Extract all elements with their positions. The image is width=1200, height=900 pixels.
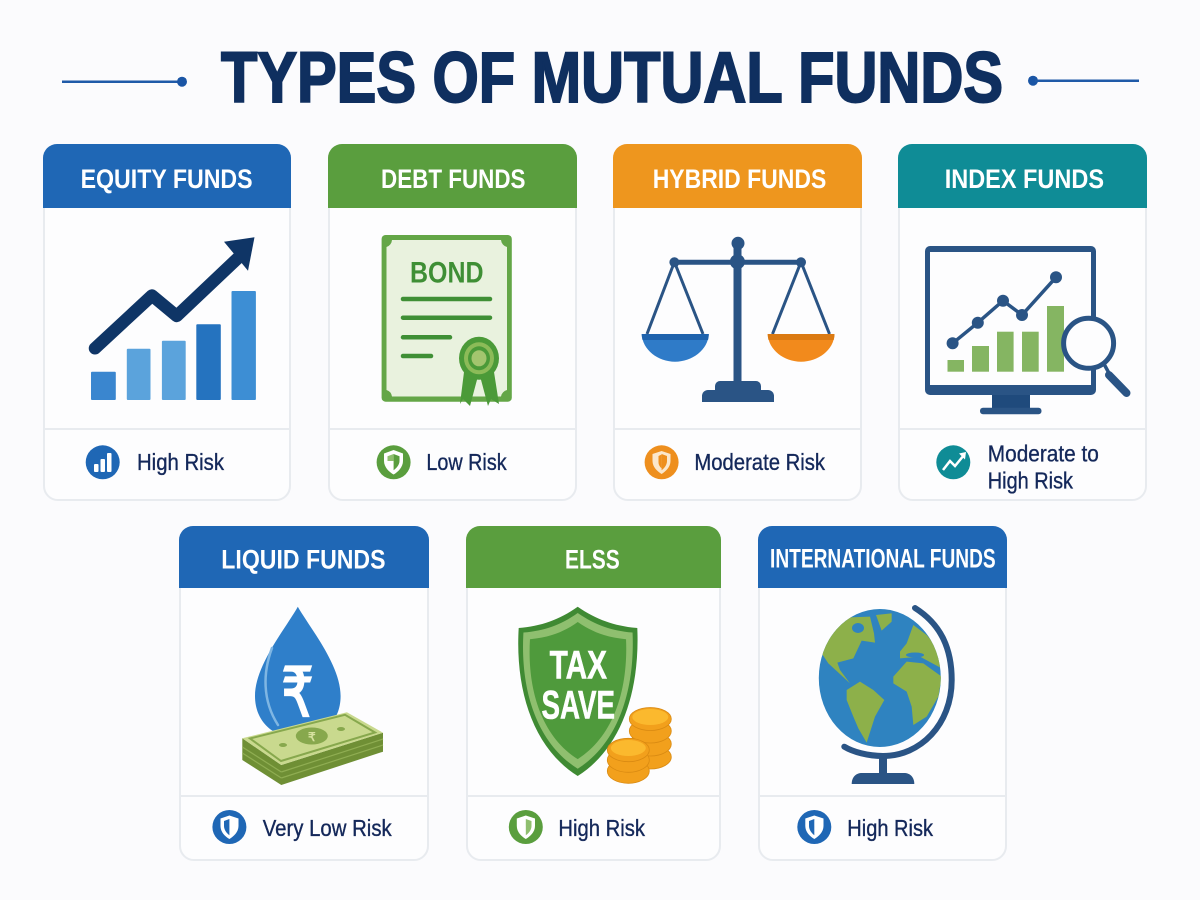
icon: balance scale xyxy=(642,237,834,402)
panel: debt funds xyxy=(328,144,577,500)
risk label: Low Risk xyxy=(426,449,507,475)
risk label: High Risk xyxy=(558,815,645,841)
panel: equity funds: EQUITY FUNDS xyxy=(81,164,253,194)
risk label: Very Low Risk xyxy=(263,815,392,841)
risk label: High Risk xyxy=(137,449,224,475)
risk badge: moderate to high risk xyxy=(936,445,970,479)
heading: debt funds xyxy=(328,144,577,208)
panel: equity funds xyxy=(43,144,291,500)
panel: international funds: INTERNATIONAL FUNDS xyxy=(770,544,996,574)
risk badge: elss high risk xyxy=(509,810,543,844)
risk label line two: High Risk xyxy=(988,467,1073,493)
heading: hybrid funds xyxy=(613,144,862,208)
heading: international funds xyxy=(758,526,1007,588)
panel: index funds: INDEX FUNDS xyxy=(945,164,1104,194)
panel: index funds xyxy=(898,144,1147,500)
panel: debt funds: DEBT FUNDS xyxy=(381,164,526,194)
risk badge: very low risk xyxy=(212,810,246,844)
title: TYPES OF MUTUAL FUNDS xyxy=(221,39,1003,118)
icon: water drop with rupee and cash xyxy=(242,607,383,785)
panel: international funds xyxy=(758,526,1007,861)
heading: index funds xyxy=(898,144,1147,208)
risk badge: high risk xyxy=(86,445,120,479)
risk label: High Risk xyxy=(847,815,933,841)
risk label: Moderate to xyxy=(988,441,1099,467)
icon: bond certificate: BOND xyxy=(410,257,484,290)
panel: liquid funds xyxy=(179,526,429,860)
icon: water drop with rupee and cash: ₹ xyxy=(308,730,316,744)
risk badge: moderate risk xyxy=(645,445,679,479)
panel: hybrid funds xyxy=(613,144,862,500)
heading: equity funds xyxy=(43,144,291,208)
icon: water drop with rupee and cash: ₹ xyxy=(282,655,314,731)
icon: tax save shield with coins xyxy=(518,607,671,783)
panel: elss xyxy=(466,526,721,860)
panel: elss: ELSS xyxy=(565,544,620,574)
risk badge: low risk xyxy=(377,445,411,479)
icon: tax save shield with coins: SAVE xyxy=(542,683,615,727)
icon: monitor with chart and magnifier xyxy=(925,246,1126,414)
icon: bond certificate xyxy=(382,235,512,406)
heading: elss xyxy=(466,526,721,588)
heading: liquid funds xyxy=(179,526,429,588)
panel: liquid funds: LIQUID FUNDS xyxy=(221,544,386,574)
risk badge: international high risk xyxy=(797,810,831,844)
icon: tax save shield with coins: TAX xyxy=(550,643,607,687)
icon: globe on stand xyxy=(818,605,955,784)
icon: rising bar chart with arrow xyxy=(91,237,256,400)
panel: hybrid funds: HYBRID FUNDS xyxy=(653,164,826,194)
risk label: Moderate Risk xyxy=(694,449,825,475)
